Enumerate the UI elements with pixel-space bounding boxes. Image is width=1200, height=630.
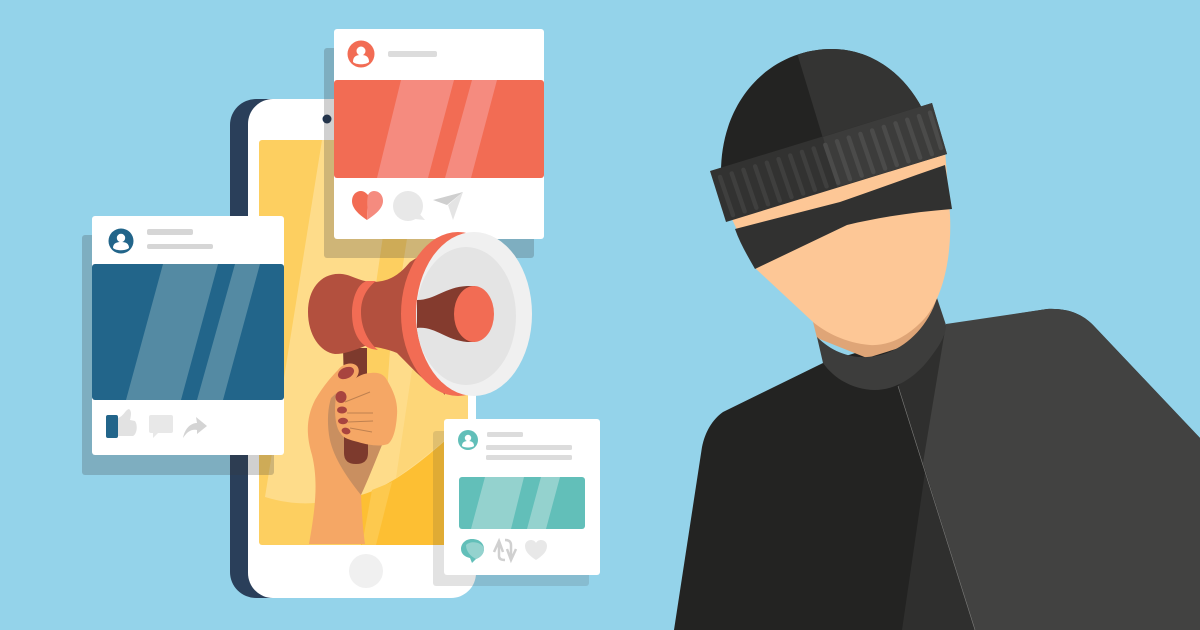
phone <box>230 99 476 598</box>
finger lines <box>345 392 373 432</box>
card base <box>92 216 284 455</box>
beanie ribs <box>720 113 941 215</box>
icon: comment <box>149 415 173 438</box>
avatar <box>108 228 134 254</box>
hand: arm <box>308 363 365 544</box>
image <box>92 264 284 400</box>
image highlights <box>471 477 560 529</box>
icon: heart <box>352 191 383 220</box>
megaphone back <box>308 240 445 395</box>
nails <box>336 364 356 435</box>
jacket right <box>923 309 1200 630</box>
camera dot <box>322 114 332 124</box>
icon: speech bubble <box>393 191 425 221</box>
name bars <box>147 229 193 235</box>
mask <box>735 165 952 269</box>
neck shadow <box>813 300 938 358</box>
post card: blue <box>92 216 284 455</box>
hand: fist <box>335 373 397 445</box>
name bar <box>388 51 437 57</box>
collar <box>817 298 946 390</box>
icon: thumbs up <box>106 409 137 438</box>
megaphone cone white <box>416 232 532 396</box>
icon: share arrow <box>183 417 207 438</box>
phone body <box>248 99 476 598</box>
megaphone and hand <box>308 232 532 544</box>
card base <box>334 29 544 239</box>
megaphone rim <box>401 232 515 396</box>
text bars <box>486 432 572 460</box>
megaphone driver cap <box>454 286 494 342</box>
image highlights <box>126 264 260 400</box>
icon: heart <box>525 540 547 560</box>
megaphone handle lower <box>344 435 368 464</box>
icon: speech bubble <box>461 539 484 563</box>
torso <box>674 309 1200 630</box>
megaphone ring <box>352 281 378 350</box>
card base <box>444 419 600 575</box>
avatar <box>458 430 478 450</box>
phone screen <box>259 140 468 545</box>
beanie crown <box>721 49 922 168</box>
thief <box>674 45 1200 630</box>
image highlights <box>377 80 497 178</box>
post card: red <box>334 29 544 239</box>
card shadows <box>82 48 589 586</box>
torso dark <box>674 309 1200 630</box>
icon: send arrow <box>433 192 463 220</box>
beanie band <box>710 103 947 222</box>
icon: retweet arrows <box>494 540 516 560</box>
home button <box>349 554 383 588</box>
beanie <box>710 45 947 222</box>
megaphone cone inner <box>416 247 516 385</box>
seam line <box>898 386 975 630</box>
image <box>459 477 585 529</box>
face <box>730 150 950 345</box>
image <box>334 80 544 178</box>
phone back <box>230 99 350 598</box>
megaphone handle upper <box>343 348 367 385</box>
avatar <box>348 40 374 68</box>
hand: shadow <box>328 385 382 495</box>
megaphone driver <box>417 286 475 342</box>
jacket fold <box>898 335 975 630</box>
post card: teal <box>444 419 600 575</box>
